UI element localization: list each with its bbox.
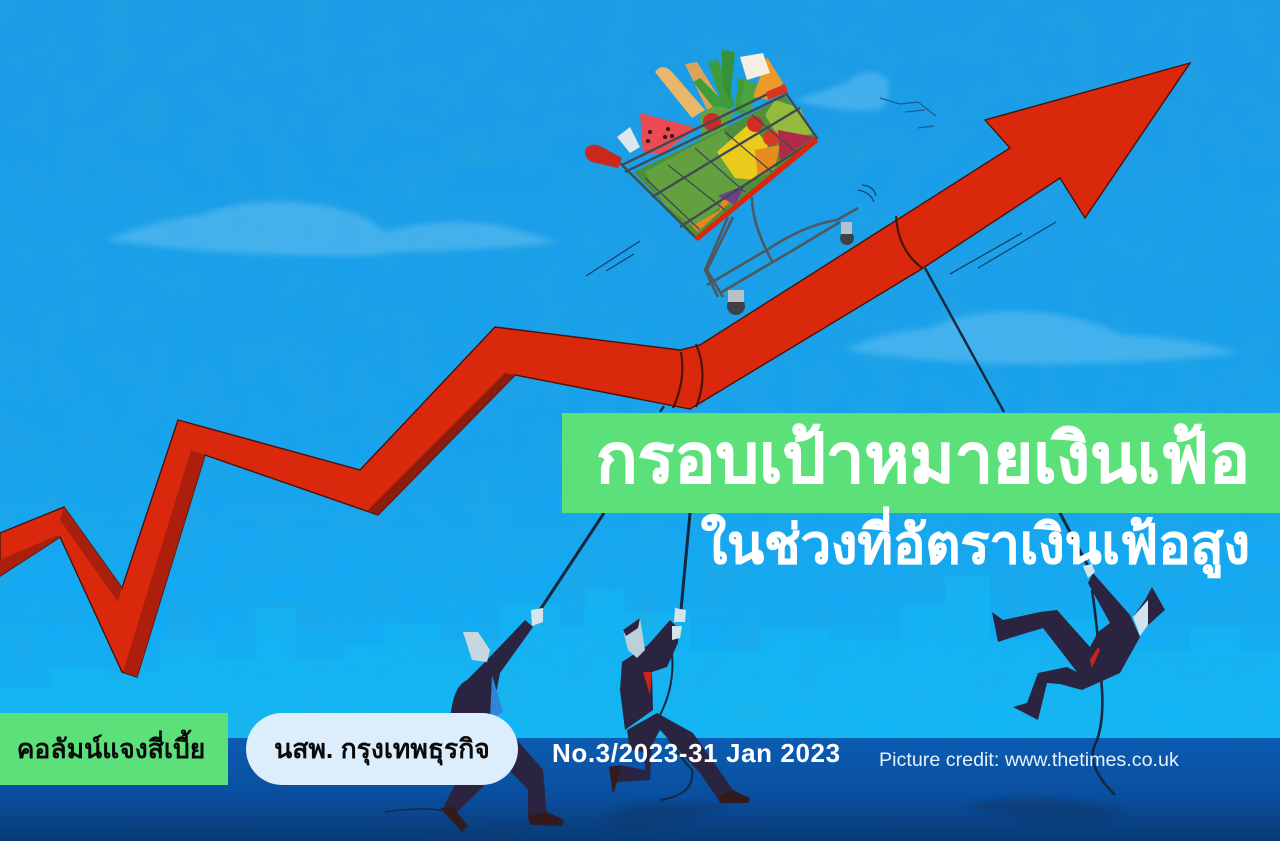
subtitle text: ในช่วงที่อัตราเงินเฟ้อสูง — [701, 515, 1250, 575]
issue number and date: No.3/2023-31 Jan 2023 — [552, 738, 841, 768]
cart contents — [655, 67, 705, 118]
cart frame and wheels — [705, 197, 858, 297]
column tag — [0, 713, 228, 785]
businessman left — [440, 608, 564, 832]
picture credit: Picture credit: www.thetimes.co.uk — [879, 749, 1179, 771]
cart basket — [620, 88, 817, 238]
skyline — [0, 575, 1280, 740]
ropes — [385, 268, 1115, 812]
clouds — [105, 72, 1240, 364]
sea — [0, 738, 1280, 841]
birds — [880, 98, 936, 128]
column tag: คอลัมน์แจงสี่เบี้ย — [17, 734, 205, 764]
speed lines — [586, 222, 1056, 276]
arrow bands — [673, 216, 922, 408]
businessman right falling — [992, 564, 1165, 720]
figure shadows — [430, 796, 1125, 841]
publisher pill: นสพ. กรุงเทพธุรกิจ — [274, 734, 490, 764]
shopping cart — [585, 50, 876, 315]
publisher pill — [246, 713, 518, 785]
title text: กรอบเป้าหมายเงินเฟ้อ — [596, 420, 1250, 497]
businessman middle — [609, 608, 750, 803]
growth arrow — [0, 63, 1190, 677]
title banner — [562, 413, 1280, 513]
